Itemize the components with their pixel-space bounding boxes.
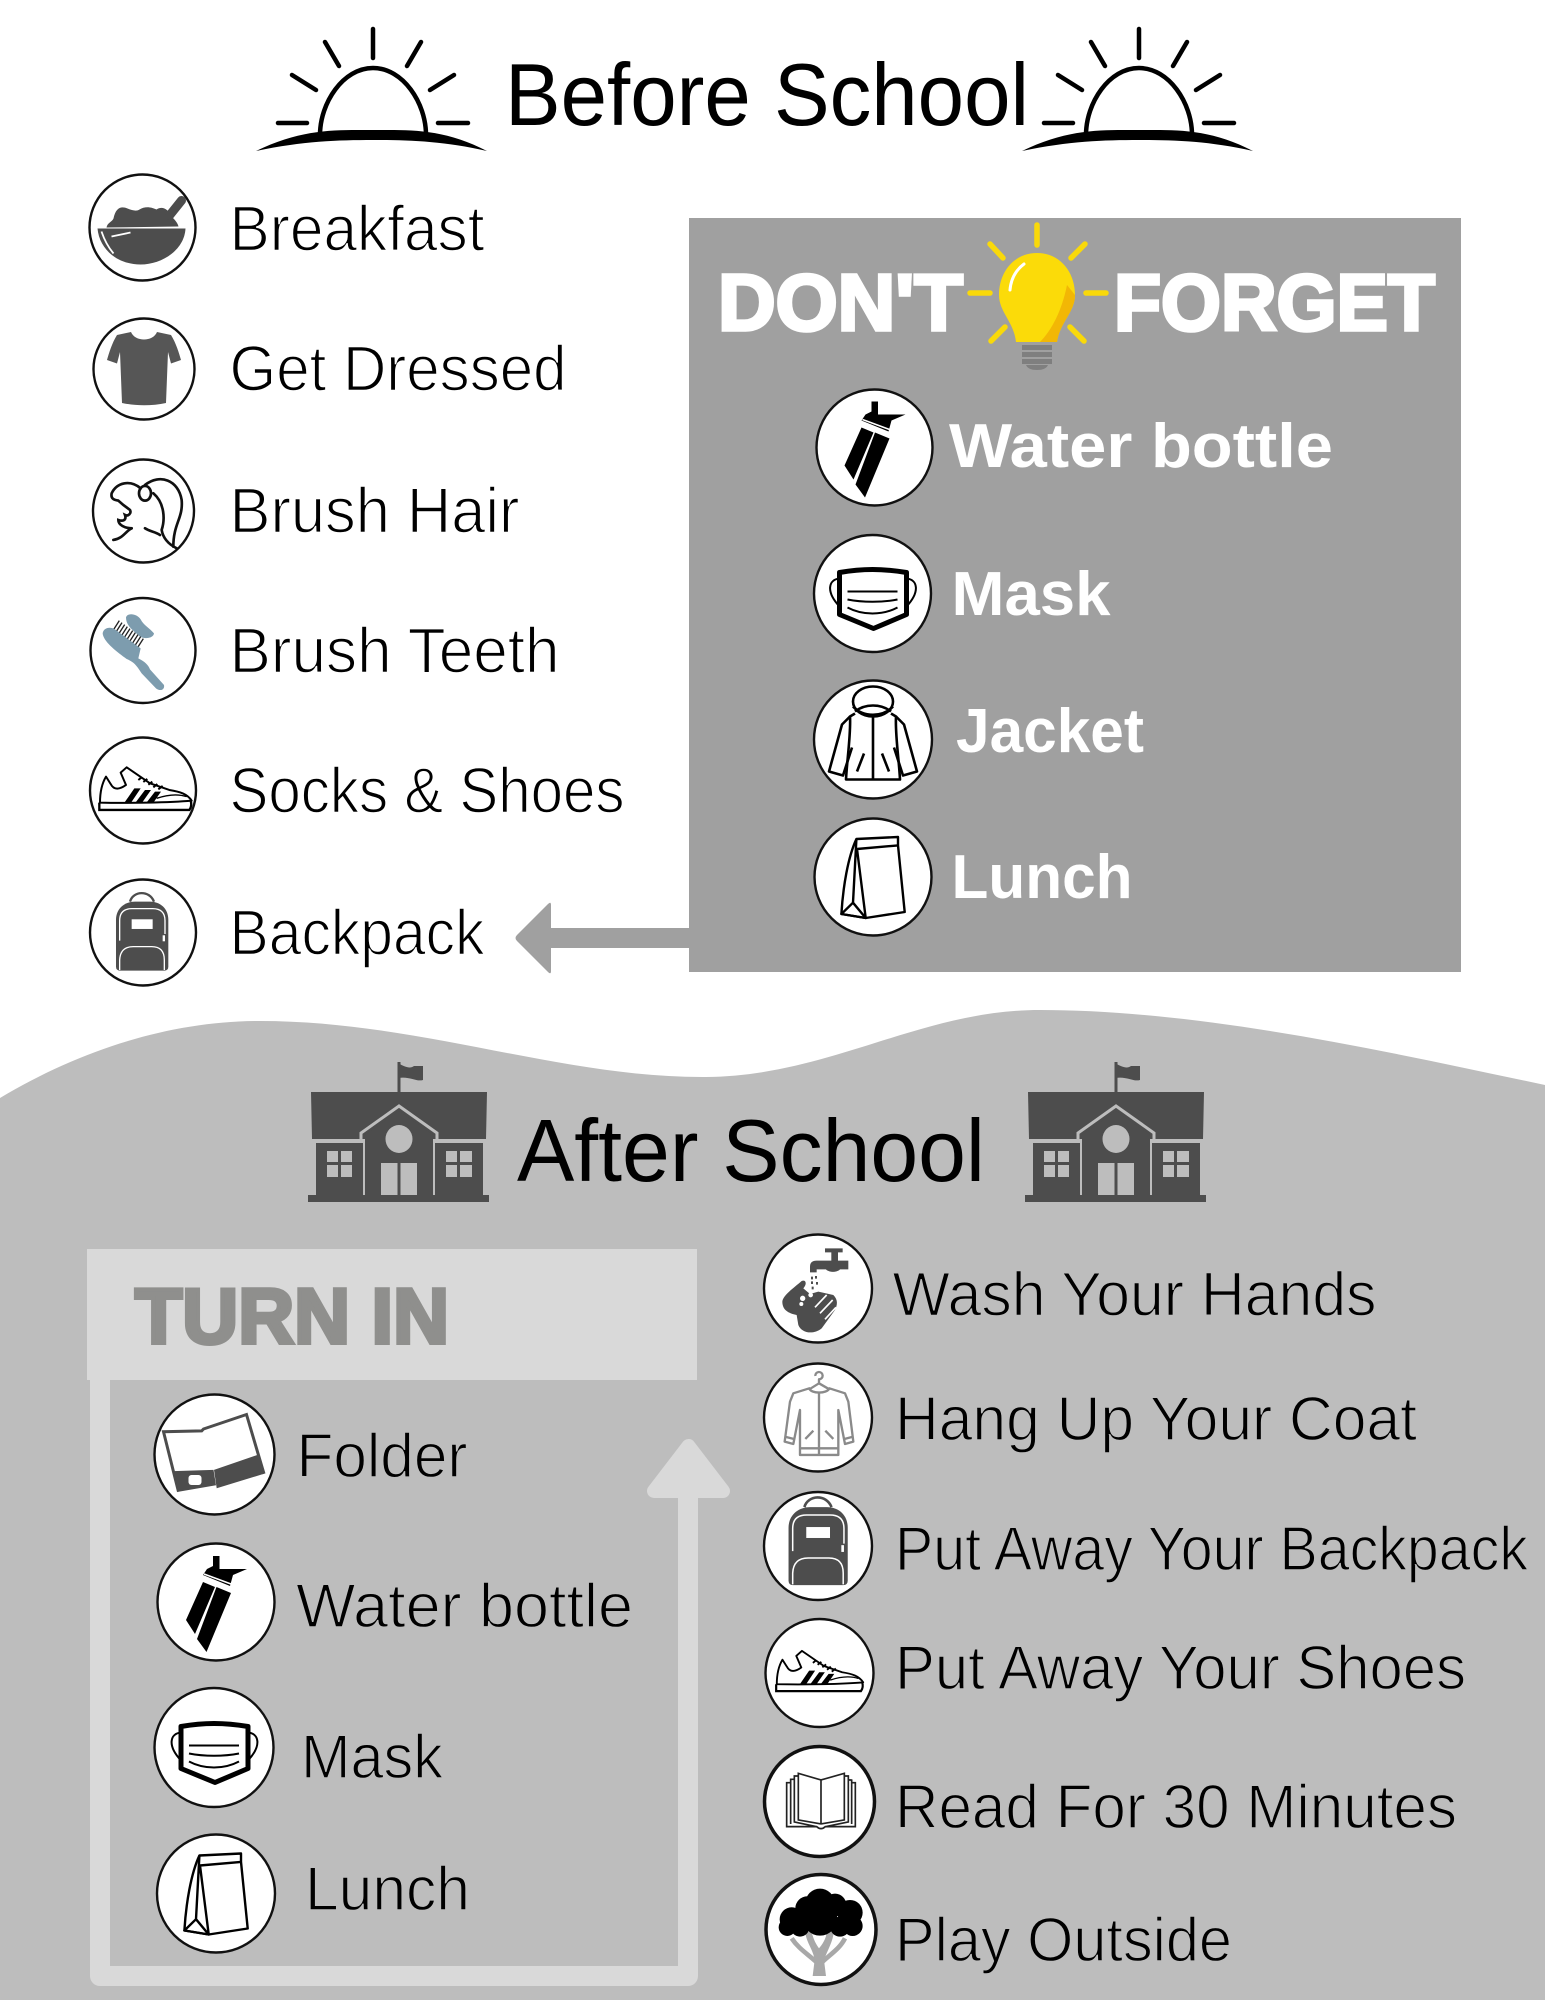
icon: hair ponytail xyxy=(93,460,194,562)
label: Lunch xyxy=(305,1855,470,1924)
label: Socks & Shoes xyxy=(230,754,624,826)
label: Breakfast xyxy=(230,192,485,264)
wave background: after school section xyxy=(0,1010,1545,2000)
icon: sunrise right xyxy=(1022,29,1253,151)
item: Breakfast xyxy=(90,174,485,280)
label: Folder xyxy=(296,1422,468,1491)
header: After School xyxy=(308,1062,1206,1202)
title: After School: After School xyxy=(517,1101,985,1200)
label: Brush Hair xyxy=(230,474,520,546)
item: Brush Teeth xyxy=(90,598,560,703)
frame xyxy=(100,1380,688,1976)
heading: DON'T FORGET xyxy=(718,258,1435,347)
item: Water bottle xyxy=(158,1544,633,1660)
icon: backpack xyxy=(90,880,196,986)
heading: DON'T FORGET: DON'T xyxy=(718,258,963,347)
item: Lunch xyxy=(814,818,1132,936)
label: Put Away Your Shoes xyxy=(895,1634,1466,1703)
header: Before School xyxy=(256,29,1253,151)
panel: before school checklist xyxy=(90,174,624,986)
icon: coat on hanger xyxy=(764,1364,872,1472)
icon: tree xyxy=(766,1874,876,1984)
icon: toothbrush xyxy=(90,598,196,703)
label: Wash Your Hands xyxy=(892,1260,1376,1330)
label: Play Outside xyxy=(895,1906,1232,1975)
title: Before School: Before School xyxy=(505,45,1029,144)
heading: TURN IN: TURN IN xyxy=(135,1272,449,1360)
icon: mask xyxy=(814,535,931,652)
icon: hand washing xyxy=(764,1234,872,1342)
item: Wash Your Hands xyxy=(764,1234,1376,1342)
label: Water bottle xyxy=(296,1572,633,1641)
panel background xyxy=(689,218,1461,972)
icon: backpack xyxy=(764,1492,872,1600)
icon: folder xyxy=(154,1394,274,1514)
icon: open book xyxy=(764,1746,874,1856)
icon: sneaker xyxy=(90,738,196,844)
item: Play Outside xyxy=(766,1874,1232,1984)
item: Mask xyxy=(814,535,1111,652)
heading: DON'T FORGET: FORGET xyxy=(1114,258,1435,347)
item: Socks and Shoes xyxy=(90,738,624,844)
label: Read For 30 Minutes xyxy=(895,1773,1457,1842)
item: Put Away Your Backpack xyxy=(764,1492,1529,1600)
icon: water bottle xyxy=(816,390,932,506)
item: Lunch xyxy=(157,1834,470,1952)
label: Mask xyxy=(301,1723,444,1792)
label: Water bottle xyxy=(949,412,1333,481)
header bar xyxy=(87,1249,697,1380)
icon: lunch bag xyxy=(814,818,932,936)
icon: jacket xyxy=(814,680,932,798)
panel: don't forget xyxy=(689,218,1461,972)
item: Hang Up Your Coat xyxy=(764,1364,1417,1472)
icon: school left xyxy=(308,1062,489,1202)
item: Get Dressed xyxy=(94,318,566,420)
item: Mask xyxy=(154,1688,444,1807)
icon: t-shirt xyxy=(94,318,194,420)
item: Folder xyxy=(154,1394,468,1514)
label: Hang Up Your Coat xyxy=(895,1385,1417,1454)
arrow head xyxy=(654,1446,723,1491)
label: Lunch xyxy=(952,843,1132,912)
item: Backpack xyxy=(90,880,485,986)
item: Jacket xyxy=(814,680,1144,798)
label: Brush Teeth xyxy=(230,614,560,686)
icon: lunch bag xyxy=(157,1834,275,1952)
item: Water bottle xyxy=(816,390,1333,506)
icon: school right xyxy=(1025,1062,1206,1202)
label: Get Dressed xyxy=(230,332,566,404)
icon: sneaker xyxy=(766,1619,874,1727)
item: Put Away Your Shoes xyxy=(766,1619,1466,1727)
panel: after school checklist xyxy=(764,1234,1529,1984)
icon: bowl xyxy=(90,174,196,280)
item: Read For 30 Minutes xyxy=(764,1746,1457,1856)
label: Mask xyxy=(952,560,1111,629)
icon: mask xyxy=(154,1688,274,1807)
item: Brush Hair xyxy=(93,460,520,562)
icon: sunrise left xyxy=(256,29,487,151)
arrow: into backpack xyxy=(516,903,689,973)
panel: turn in xyxy=(87,1249,723,1976)
icon: water bottle xyxy=(158,1544,274,1660)
icon: light bulb xyxy=(970,225,1106,370)
label: Backpack xyxy=(230,896,485,968)
label: Jacket xyxy=(956,697,1144,766)
